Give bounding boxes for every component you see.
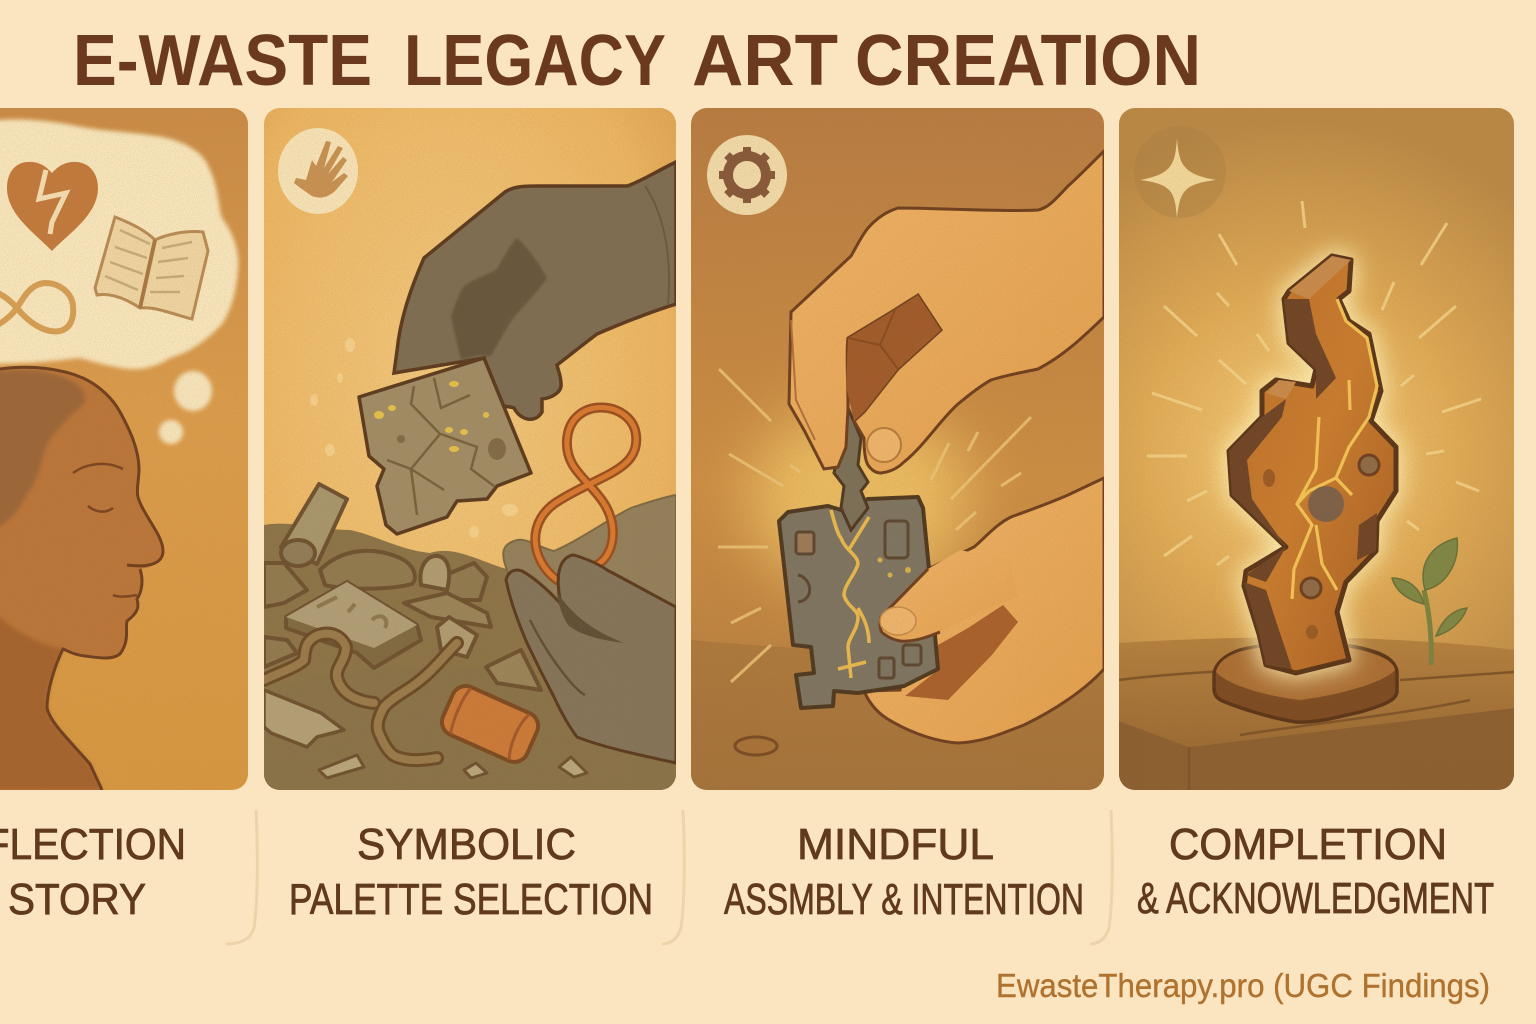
orange figure-eight wire (535, 408, 636, 580)
coin on bench (735, 737, 777, 755)
icon: infinity (0, 283, 73, 332)
wooden table (1119, 637, 1514, 790)
title (73, 21, 1201, 101)
small chips (319, 755, 587, 778)
embedded components (1308, 486, 1344, 522)
metal shard (834, 408, 868, 530)
tube (264, 690, 344, 747)
caption: mindful assembly and intention (724, 820, 1084, 924)
sculpture glow (1229, 256, 1396, 673)
light rays (1147, 201, 1481, 565)
sparks (310, 338, 518, 538)
circuit fragment (359, 358, 531, 534)
caption: reflection and story (0, 820, 186, 924)
orange capacitor (437, 682, 543, 766)
glow (750, 405, 970, 595)
icon: hand badge (278, 128, 358, 214)
caption: symbolic palette selection: PALETTE SELECTION (289, 875, 653, 924)
sculpture base (1214, 643, 1397, 722)
sculpture (1229, 256, 1396, 673)
upper gloved hand (394, 162, 676, 419)
hand holding shard (789, 151, 1104, 473)
caption: symbolic palette selection (289, 820, 653, 924)
energy rays (718, 369, 1031, 682)
panel: symbolic palette selection (264, 108, 676, 790)
green sprout (1392, 538, 1467, 665)
caption: mindful assembly and intention: ASSMBLY & INTENTION (724, 875, 1084, 924)
lower gloved hand, front (506, 555, 676, 763)
icon: gear badge (707, 135, 787, 215)
workbench (691, 640, 1104, 790)
caption: completion and acknowledgment (1137, 820, 1494, 923)
icon: open book (95, 217, 208, 319)
thumbnail (867, 428, 901, 462)
panel: completion and acknowledgment (1119, 108, 1514, 790)
panel: mindful assembly and intention (691, 108, 1104, 790)
golden cracks (1292, 299, 1377, 599)
title: CREATION (855, 21, 1201, 101)
closed eye, eyebrow and mouth (73, 464, 137, 597)
thought bubbles (174, 371, 212, 411)
shaded sides (1229, 299, 1377, 669)
lower supporting hand (864, 478, 1104, 743)
circuit slab (286, 582, 421, 668)
paper grain overlay (0, 108, 1514, 790)
caption: reflection and story: STORY (8, 875, 146, 924)
icon: broken heart (7, 162, 98, 251)
separator brackets (226, 810, 1112, 944)
title: LEGACY (404, 21, 666, 101)
circuit board (779, 497, 938, 708)
caption: symbolic palette selection: SYMBOLIC (357, 820, 576, 869)
rubble pile (264, 484, 676, 790)
rock fragments (264, 551, 541, 690)
golden seam (831, 510, 869, 678)
caption: mindful assembly and intention: MINDFUL (797, 820, 994, 869)
thought cloud (0, 119, 238, 444)
thumb over board (878, 550, 968, 643)
cables (264, 634, 457, 760)
broken component (281, 484, 347, 564)
person in profile (0, 367, 163, 790)
title: E-WASTE (73, 21, 372, 101)
panel: reflection and story (0, 108, 248, 790)
icon: star badge (1136, 139, 1226, 218)
title: ART (692, 21, 838, 101)
lower gloved hand, back (502, 494, 676, 606)
source credit: EwasteTherapy.pro (UGC Findings) (996, 967, 1490, 1004)
caption: completion and acknowledgment: COMPLETION (1169, 820, 1447, 869)
